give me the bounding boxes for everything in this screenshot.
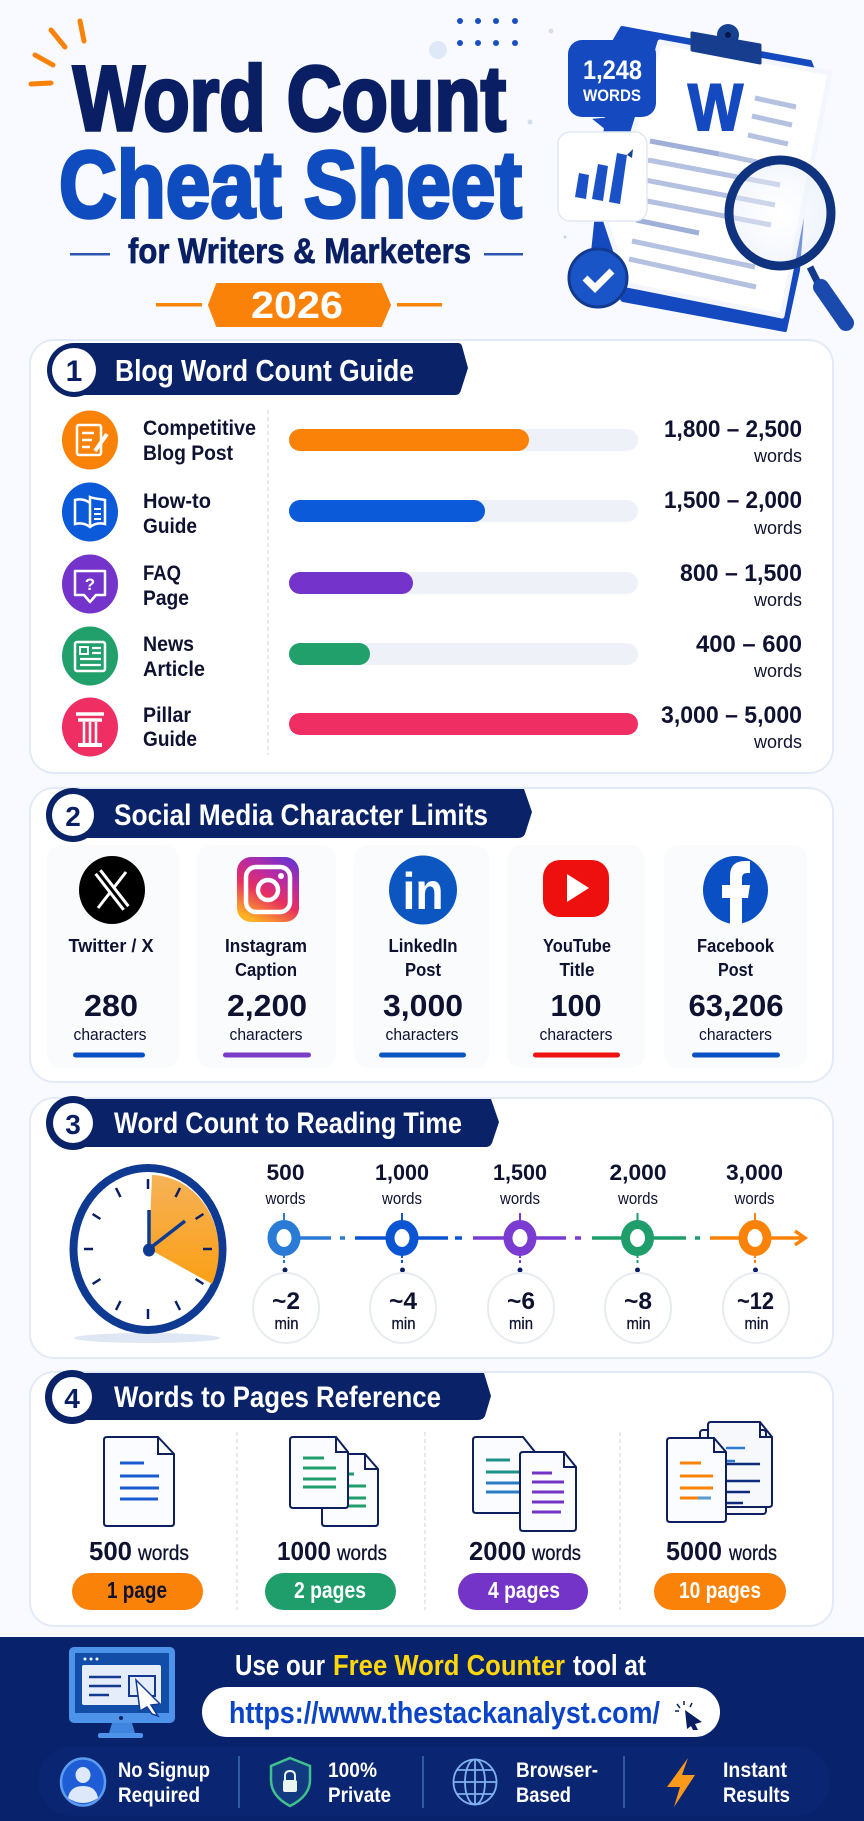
heading banner 2: [46, 788, 532, 842]
row: competitive blog post: Blog Post: [143, 442, 233, 465]
icon: linkedin logo: [389, 856, 457, 924]
card: twitter: [47, 845, 179, 1068]
column: 1000 words: 2 pages: [294, 1577, 366, 1603]
card: facebook: Post: [718, 959, 753, 980]
card: instagram: 2,200: [227, 988, 307, 1023]
word count bubble: WORDS: [583, 86, 641, 105]
card: instagram: [197, 845, 336, 1068]
milestone: 3,000 words: words: [734, 1190, 774, 1208]
timeline line: [284, 1231, 805, 1245]
row: news article: [62, 626, 802, 686]
icon: two pages: [290, 1437, 378, 1526]
milestone: 500 words: 500: [266, 1160, 304, 1185]
benefit: instant results: Results: [723, 1783, 790, 1807]
milestone: 1,500 words: [488, 1160, 554, 1343]
call to action line: Use our: [235, 1650, 325, 1682]
panel: social media character limits: [30, 788, 833, 1082]
row: how-to guide: How-to: [143, 490, 211, 513]
icon: linkedin logo: in: [402, 863, 444, 921]
Word W logo: W: [688, 70, 744, 144]
column: 500 words: words: [137, 1542, 189, 1565]
milestone: 1,500 words: min: [509, 1314, 533, 1333]
heading banner 3: Word Count to Reading Time: [114, 1107, 462, 1140]
milestone: 500 words: [253, 1160, 319, 1343]
row: news article: 400 – 600: [696, 631, 802, 658]
title line 1: Word Count: [73, 48, 506, 150]
icon: shield lock: [271, 1758, 310, 1806]
milestone: 500 words: words: [265, 1190, 306, 1208]
milestone: 1,000 words: [370, 1160, 436, 1343]
call to action line: Free Word Counter: [333, 1650, 565, 1682]
row: FAQ page: FAQ: [143, 562, 181, 585]
row: pillar guide: words: [753, 732, 802, 752]
card: youtube: characters: [540, 1025, 612, 1044]
milestone: 3,000 words: ~12: [737, 1288, 774, 1315]
milestone: 500 words: min: [274, 1314, 298, 1333]
icon: lightning bolt: [667, 1758, 695, 1807]
icon: globe: [454, 1760, 496, 1804]
icon: facebook logo: [703, 856, 768, 924]
column: 5000 words: 10 pages: [679, 1577, 761, 1603]
card: twitter: 280: [84, 988, 138, 1023]
icon: X logo: [79, 856, 145, 924]
card: youtube: Title: [560, 959, 594, 980]
icon: click cursor: [675, 1701, 702, 1730]
clip: [692, 24, 760, 63]
card: linkedin: 3,000: [383, 988, 463, 1023]
milestone: 2,000 words: 2,000: [610, 1160, 666, 1185]
benefit: instant results: [667, 1758, 790, 1807]
row: how-to guide: Guide: [143, 515, 197, 538]
milestone: 3,000 words: min: [744, 1314, 768, 1333]
column: 500 words: 1 page: [107, 1577, 167, 1603]
column: 1000 words: words: [336, 1542, 387, 1565]
icon: one page: [104, 1437, 174, 1526]
icon: clock: [74, 1168, 222, 1343]
word count bubble: [568, 40, 656, 128]
milestone: 1,500 words: 1,500: [493, 1160, 547, 1185]
row: how-to guide: words: [753, 518, 802, 538]
icon: youtube logo: [543, 860, 609, 917]
benefit: no signup: No Signup: [118, 1758, 210, 1782]
card: linkedin: characters: [386, 1025, 458, 1044]
column: 2000 words: [458, 1437, 588, 1610]
milestone: 2,000 words: words: [617, 1190, 658, 1208]
card: instagram: characters: [230, 1025, 302, 1044]
column: 2000 words: 4 pages: [488, 1577, 560, 1603]
card: instagram: Caption: [235, 959, 297, 980]
check badge: [569, 249, 627, 307]
heading banner 1: Blog Word Count Guide: [115, 353, 414, 388]
word count bubble: 1,248: [583, 55, 642, 85]
icon: user: [61, 1758, 105, 1806]
card: youtube: 100: [550, 988, 602, 1023]
card: twitter: Twitter / X: [68, 935, 154, 956]
milestone: 1,000 words: 1,000: [375, 1160, 429, 1185]
card: facebook: 63,206: [688, 988, 784, 1023]
panel: blog word count guide: [30, 340, 833, 773]
row: FAQ page: [62, 554, 802, 614]
decorative dots: [429, 18, 566, 238]
row: competitive blog post: Competitive: [143, 417, 256, 440]
column: 1000 words: 1000: [277, 1536, 331, 1566]
footer call to action: [0, 1637, 864, 1821]
row: pillar guide: Pillar: [143, 704, 191, 727]
heading banner 4: 4: [64, 1383, 80, 1414]
row: pillar guide: Guide: [143, 728, 197, 751]
column: 1000 words: [265, 1437, 396, 1610]
row: FAQ page: words: [753, 590, 802, 610]
column: 5000 words: words: [728, 1542, 777, 1565]
benefit: private: [271, 1758, 391, 1807]
icon: pillar: [62, 698, 118, 756]
card: facebook: characters: [699, 1025, 772, 1044]
card: youtube: YouTube: [543, 935, 611, 956]
milestone: 1,000 words: ~4: [389, 1288, 418, 1315]
year badge: [156, 284, 442, 327]
icon: page stack: [667, 1422, 772, 1522]
milestone: 1,000 words: words: [381, 1190, 422, 1208]
column: 5000 words: [654, 1422, 786, 1610]
milestone: 1,500 words: words: [499, 1190, 540, 1208]
row: news article: News: [143, 633, 194, 656]
milestone: 500 words: ~2: [272, 1288, 300, 1315]
benefit: private: Private: [328, 1783, 391, 1807]
benefit: instant results: Instant: [723, 1758, 787, 1782]
heading banner 4: [45, 1370, 491, 1424]
milestone: 3,000 words: 3,000: [726, 1160, 783, 1185]
panel: words to pages reference: [30, 1370, 833, 1626]
subtitle: for Writers & Marketers: [128, 232, 471, 271]
row: competitive blog post: [62, 410, 802, 470]
column: 5000 words: 5000: [666, 1536, 722, 1566]
row: pillar guide: [62, 698, 802, 756]
row: pillar guide: 3,000 – 5,000: [661, 702, 802, 729]
icon: monitor with cursor: [69, 1647, 175, 1738]
icon: question bubble: [62, 554, 118, 614]
url pill: https://www.thestackanalyst.com/: [229, 1695, 660, 1730]
icon: open book: [62, 482, 118, 542]
call to action line: tool at: [573, 1650, 646, 1682]
row: competitive blog post: 1,800 – 2,500: [664, 416, 802, 443]
card: facebook: Facebook: [697, 935, 775, 956]
icon: newspaper: [62, 626, 118, 686]
card: linkedin: [354, 845, 489, 1068]
benefit: private: 100%: [328, 1758, 377, 1782]
column: 500 words: [72, 1437, 203, 1610]
row: news article: words: [753, 661, 802, 681]
milestone: 3,000 words: [723, 1160, 789, 1343]
decorative sun rays: [31, 21, 84, 84]
row: competitive blog post: words: [753, 446, 802, 466]
panel: word count to reading time: [30, 1096, 833, 1358]
benefit: browser based: Based: [516, 1783, 571, 1807]
card: linkedin: Post: [405, 959, 441, 980]
card: facebook: [664, 845, 807, 1068]
chart card: [558, 132, 647, 221]
heading banner 3: 3: [65, 1109, 81, 1140]
heading banner 1: 1: [66, 355, 82, 388]
benefit: no signup: [61, 1758, 210, 1807]
card: linkedin: LinkedIn: [388, 935, 458, 956]
heading banner 3: [46, 1096, 499, 1150]
heading banner 4: Words to Pages Reference: [114, 1381, 441, 1414]
benefit: browser based: [454, 1758, 598, 1807]
milestone: 1,000 words: min: [392, 1314, 416, 1333]
card: instagram: Instagram: [225, 935, 307, 956]
row: news article: Article: [143, 658, 205, 681]
milestone: 2,000 words: ~8: [624, 1288, 652, 1315]
column: 2000 words: words: [531, 1542, 581, 1565]
milestone: 1,500 words: ~6: [507, 1288, 535, 1315]
column: 500 words: 500: [89, 1536, 132, 1566]
year badge: 2026: [251, 285, 343, 327]
row: FAQ page: Page: [143, 587, 189, 610]
column: 2000 words: 2000: [469, 1536, 526, 1566]
heading banner 2: 2: [65, 801, 81, 832]
icon: document with pencil: [62, 410, 118, 470]
heading banner 2: Social Media Character Limits: [114, 799, 488, 832]
icon: stacked pages: [473, 1437, 576, 1531]
milestone: 2,000 words: [605, 1160, 671, 1343]
paper: [606, 42, 830, 316]
row: how-to guide: 1,500 – 2,000: [664, 487, 802, 514]
illustration: clipboard document: [558, 24, 846, 330]
paper text lines: [629, 98, 796, 287]
card: twitter: characters: [74, 1025, 146, 1044]
clipboard board: [592, 28, 813, 330]
milestone: 2,000 words: min: [626, 1314, 650, 1333]
row: FAQ page: 800 – 1,500: [680, 560, 802, 587]
url pill: [202, 1687, 720, 1737]
icon: instagram logo: [237, 857, 299, 922]
title line 2: Cheat Sheet: [59, 132, 522, 238]
benefit: no signup: Required: [118, 1783, 200, 1807]
icon: question bubble: ?: [85, 575, 95, 594]
row: how-to guide: [62, 482, 802, 542]
call to action line: [235, 1650, 646, 1682]
benefit: browser based: Browser-: [516, 1758, 598, 1782]
heading banner 1: [47, 343, 468, 397]
magnifying glass: [729, 160, 846, 323]
card: youtube: [507, 845, 645, 1068]
